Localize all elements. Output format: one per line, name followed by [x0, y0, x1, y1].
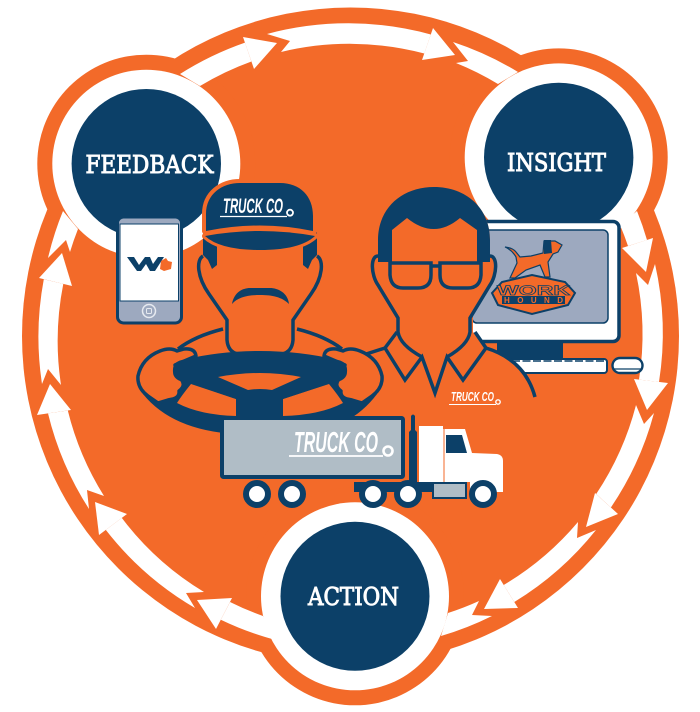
cab: [419, 426, 503, 492]
cycle ring arcs: [38, 23, 663, 639]
trailer: [222, 418, 403, 477]
fuel tank: [433, 483, 466, 498]
action node: [261, 502, 449, 690]
desktop computer: [466, 222, 642, 373]
truck driver: [138, 183, 382, 434]
exhaust stack: [409, 414, 417, 484]
smartphone: [118, 217, 182, 323]
driver sideburns: [203, 232, 317, 269]
driver cap: TRUCK CO: [223, 195, 283, 218]
steering wheel spokes: [173, 351, 347, 420]
office worker: [360, 187, 535, 420]
feedback node: [52, 70, 240, 258]
shirt logo: TRUCK CO: [451, 389, 494, 404]
steering wheel rim: [143, 372, 377, 434]
driver moustache: [232, 288, 289, 304]
driver cap: [205, 183, 315, 250]
insight node: INSIGHT: [507, 149, 606, 177]
insight node: [465, 63, 653, 251]
trailer: TRUCK CO: [294, 427, 378, 459]
wheels: [246, 483, 494, 505]
workhound logo: HOUND: [504, 296, 563, 305]
driver shoulders: [178, 329, 342, 349]
shirt logo: [449, 389, 500, 404]
workhound logo: WORK: [497, 282, 570, 298]
chassis: [354, 482, 434, 492]
feedback node: FEEDBACK: [86, 151, 214, 179]
driver head: [199, 256, 321, 354]
semi truck: [222, 414, 503, 505]
cycle arrowheads: [37, 28, 668, 629]
action node: ACTION: [307, 583, 399, 611]
workhound logo: [492, 240, 575, 314]
driver arms: [138, 349, 196, 403]
